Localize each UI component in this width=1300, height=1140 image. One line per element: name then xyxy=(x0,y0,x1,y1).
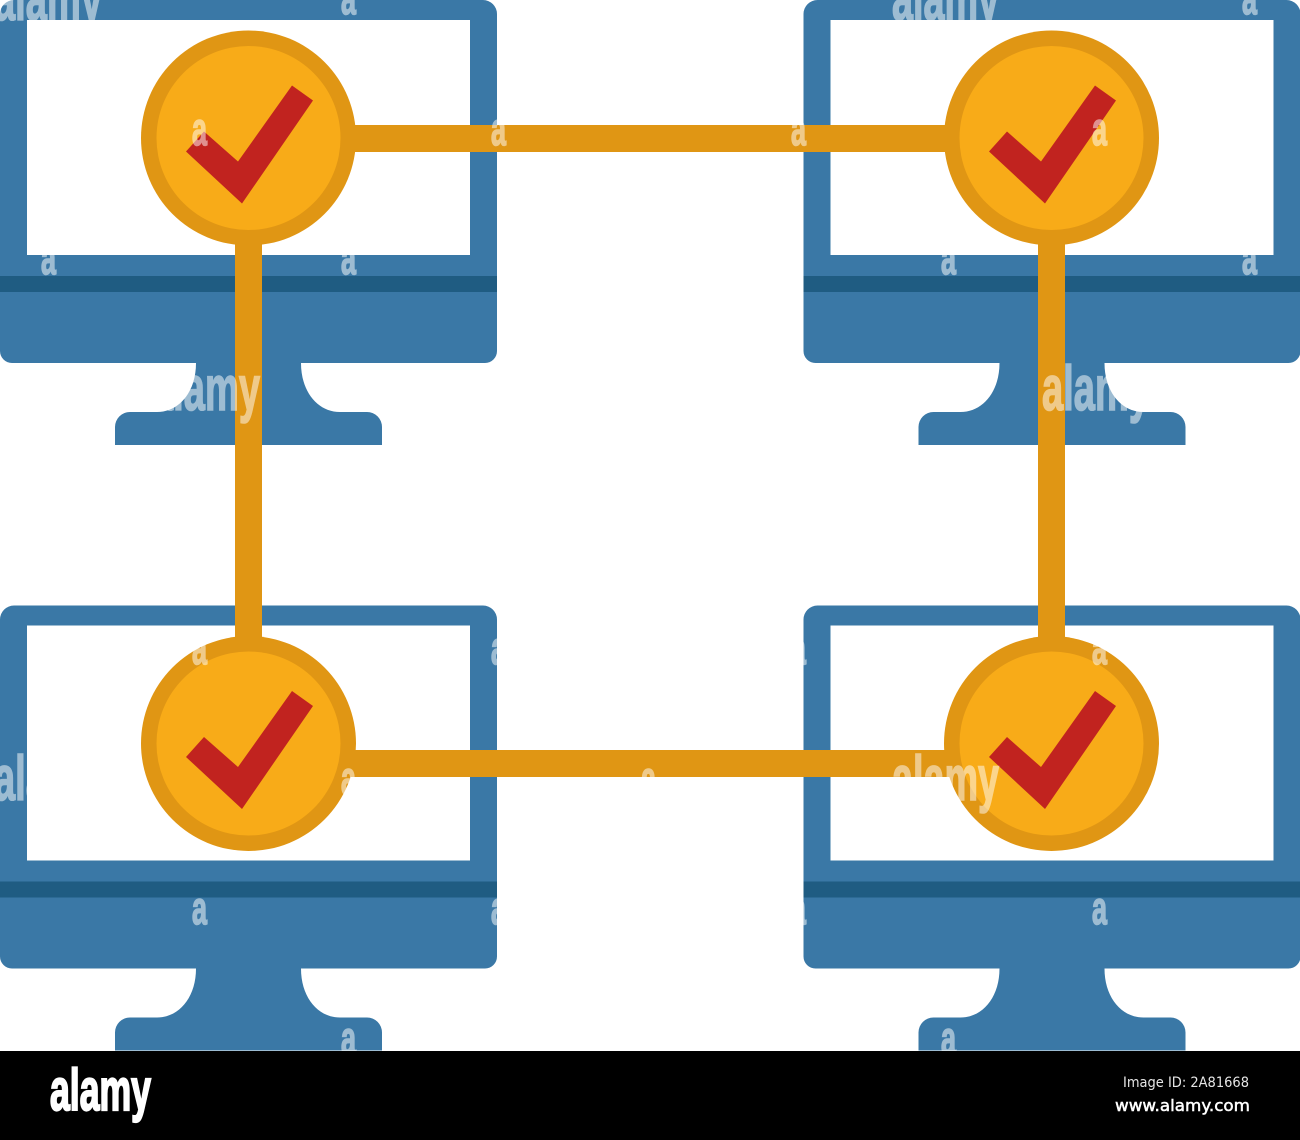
watermarks: a xyxy=(192,103,207,155)
footer logo: alamy xyxy=(50,1058,151,1123)
screen xyxy=(830,20,1274,255)
watermarks: a xyxy=(491,882,506,934)
screen xyxy=(830,626,1274,860)
badge fill xyxy=(960,46,1144,230)
connector: bottom horizontal xyxy=(248,750,1052,777)
connector: left vertical xyxy=(235,138,262,744)
watermarks: a xyxy=(192,882,207,934)
watermarks: a xyxy=(941,232,956,284)
watermarks: a xyxy=(491,622,506,674)
watermarks: a xyxy=(1092,622,1107,674)
watermarks: a xyxy=(1092,103,1107,155)
watermarks: a xyxy=(941,1012,956,1064)
watermarks: alamy xyxy=(1042,354,1150,424)
monitor body and stand xyxy=(0,0,497,445)
badge: top right check xyxy=(944,30,1159,246)
badge ring xyxy=(944,636,1159,851)
icon: check mark xyxy=(186,691,313,809)
image id: Image ID: 2A81668 xyxy=(1123,1075,1249,1091)
watermarks: a xyxy=(1242,232,1257,284)
bezel band xyxy=(0,276,497,292)
watermarks: alamy xyxy=(152,354,260,424)
watermarks: a xyxy=(791,882,806,934)
icon: check mark xyxy=(186,86,313,204)
badge fill xyxy=(156,652,340,836)
website: www.alamy.com xyxy=(1115,1096,1250,1115)
watermarks: alamy xyxy=(892,744,999,814)
screen xyxy=(27,626,470,860)
bezel band xyxy=(804,276,1300,292)
monitor body and stand xyxy=(804,0,1300,445)
connector: right vertical xyxy=(1038,138,1065,744)
monitor: top right xyxy=(804,0,1300,445)
icon: check mark xyxy=(989,691,1116,809)
bezel band xyxy=(0,882,497,898)
watermarks: a xyxy=(791,103,806,155)
badge fill xyxy=(960,652,1144,836)
monitor body and stand xyxy=(0,606,497,1050)
watermarks: a xyxy=(41,232,56,284)
monitor: bottom right xyxy=(804,606,1300,1050)
watermarks: a xyxy=(341,232,356,284)
monitor body and stand xyxy=(804,606,1300,1050)
watermarks: a xyxy=(341,752,356,804)
badge ring xyxy=(141,636,356,851)
badge ring xyxy=(944,30,1159,246)
watermarks: a xyxy=(341,1012,356,1064)
badge: top left check xyxy=(141,30,356,246)
badge ring xyxy=(141,30,356,246)
badge fill xyxy=(156,46,340,230)
connector: top horizontal xyxy=(248,125,1052,152)
watermarks: a xyxy=(491,103,506,155)
footer bar xyxy=(0,1051,1300,1140)
monitor: bottom left xyxy=(0,606,497,1050)
footer background xyxy=(0,1051,1300,1140)
monitor: top left xyxy=(0,0,497,445)
bezel band xyxy=(804,882,1300,898)
screen xyxy=(27,20,470,255)
watermarks: a xyxy=(192,622,207,674)
watermarks: a xyxy=(641,752,656,804)
icon: check mark xyxy=(989,86,1116,204)
watermarks: a xyxy=(1092,882,1107,934)
badge: bottom left check xyxy=(141,636,356,851)
watermarks: a xyxy=(791,622,806,674)
badge: bottom right check xyxy=(944,636,1159,851)
